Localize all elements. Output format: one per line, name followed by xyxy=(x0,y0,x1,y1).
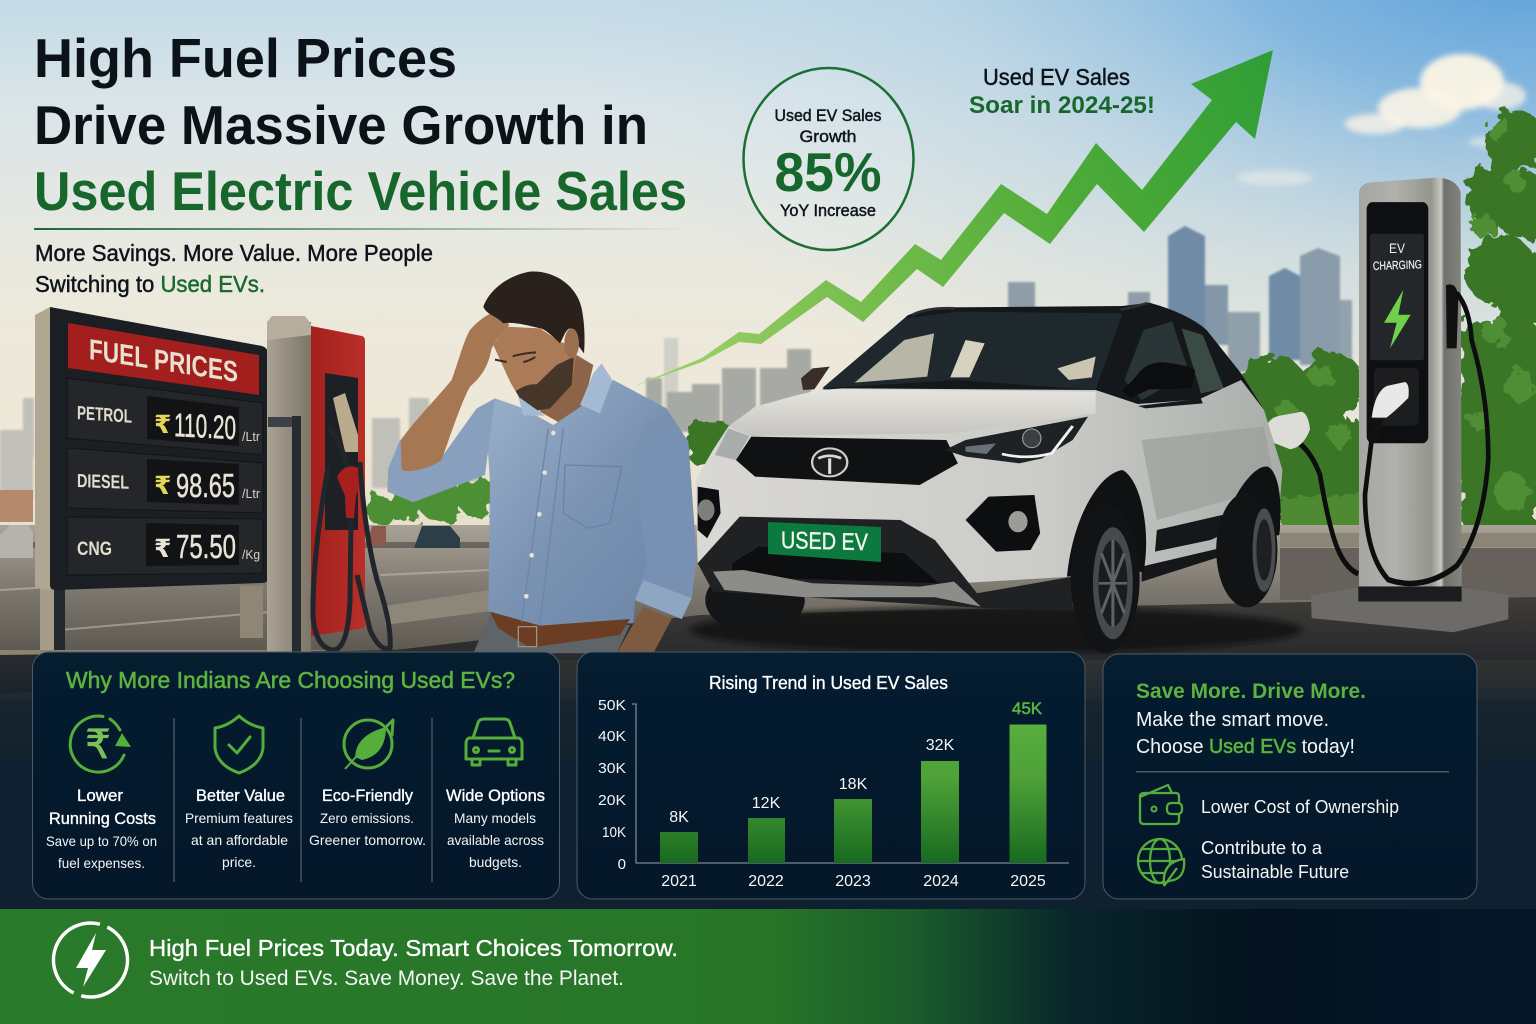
y axis labels: 0 xyxy=(618,856,626,873)
subtitle xyxy=(35,240,433,297)
price row: cng: CNG xyxy=(77,539,112,560)
shirt torso xyxy=(485,380,697,627)
bar value labels xyxy=(669,699,1043,826)
bars xyxy=(660,724,1046,863)
sign banner xyxy=(68,323,259,395)
subtitle: Switching to Used EVs. xyxy=(35,271,265,297)
main title xyxy=(34,27,687,222)
icon: car xyxy=(466,719,522,765)
right headlight xyxy=(944,417,1088,463)
benefit: cost of ownership: Lower Cost of Ownership xyxy=(1201,796,1399,817)
icon: leaf xyxy=(344,720,393,769)
x axis years: 2021 xyxy=(661,873,697,890)
fuel pump xyxy=(267,316,390,652)
skid plate xyxy=(713,570,981,607)
item: better value: price. xyxy=(222,854,256,870)
charger tower xyxy=(1359,178,1462,590)
item: better value: Premium features xyxy=(185,810,293,826)
ear xyxy=(564,328,579,358)
price row: petrol: 110.20 xyxy=(174,406,236,446)
price row: petrol xyxy=(67,378,263,455)
growth badge: Used EV Sales xyxy=(774,107,882,125)
bar value labels: 18K xyxy=(839,776,868,793)
charging cables xyxy=(1365,293,1488,583)
ev charging label: EV xyxy=(1389,240,1406,256)
left headlight xyxy=(715,428,749,460)
icon: rupee savings xyxy=(70,716,131,772)
ev charging label xyxy=(1373,240,1422,273)
panel heading: Why More Indians Are Choosing Used EVs? xyxy=(66,667,515,693)
rear wheel arch xyxy=(1216,466,1281,548)
item: lower running costs xyxy=(46,787,157,871)
y axis labels: 10K xyxy=(602,824,626,841)
growth badge: 85% xyxy=(774,141,882,203)
panel: save more xyxy=(1103,654,1477,899)
left front wheel xyxy=(705,567,805,633)
price row: diesel: DIESEL xyxy=(77,471,129,494)
side sill xyxy=(1142,513,1241,582)
price row: diesel: 98.65 xyxy=(176,467,235,504)
distant city skyline xyxy=(0,226,1352,522)
footer text: High Fuel Prices Today. Smart Choices Tomorrow. xyxy=(149,935,678,961)
item: lower running costs: Running Costs xyxy=(49,810,156,828)
price row: petrol: ₹ xyxy=(154,411,171,439)
background sky xyxy=(0,0,1536,560)
used ev number plate: USED EV xyxy=(781,527,868,556)
left fog lamp xyxy=(698,487,721,538)
arrow caption: Used EV Sales xyxy=(983,64,1130,90)
front wheel arch xyxy=(1067,470,1146,577)
growth badge: YoY Increase xyxy=(780,202,876,220)
y axis labels xyxy=(598,697,626,873)
panel: rising trend bar chart xyxy=(577,652,1085,899)
item: wide options: Wide Options xyxy=(446,787,545,805)
icon: globe with leaf xyxy=(1138,839,1184,886)
item: lower running costs: Save up to 70% on xyxy=(46,833,157,849)
item: lower running costs: fuel expenses. xyxy=(58,855,145,871)
road and pavement xyxy=(0,525,1536,700)
x axis years: 2023 xyxy=(835,873,871,890)
panel: why choosing used evs xyxy=(32,652,560,899)
price row: petrol: PETROL xyxy=(77,403,132,428)
used ev number plate xyxy=(768,522,881,562)
sign banner: FUEL PRICES xyxy=(89,334,238,389)
item: wide options: available across xyxy=(447,832,544,848)
price row: cng: 75.50 xyxy=(176,528,236,565)
price row: cng: /Kg xyxy=(242,547,260,562)
growth badge: Growth xyxy=(800,128,856,146)
hood xyxy=(728,389,1096,436)
icon: lightning circle xyxy=(41,910,140,1010)
tata badge xyxy=(812,448,847,476)
grille xyxy=(736,437,958,485)
price row: cng xyxy=(67,517,263,575)
icon: rupee savings: ₹ xyxy=(85,723,111,767)
x axis years: 2022 xyxy=(748,873,784,890)
subtitle: More Savings. More Value. More People xyxy=(35,240,433,266)
stressed man xyxy=(387,272,697,653)
suv car xyxy=(690,303,1302,653)
icon: wallet xyxy=(1140,785,1182,824)
item: better value: Better Value xyxy=(196,787,285,805)
roof and cabin xyxy=(822,303,1264,410)
wing mirror right xyxy=(1122,362,1195,398)
roadside cars xyxy=(0,525,460,558)
icon: shield xyxy=(215,716,263,773)
side windows xyxy=(1124,322,1189,400)
benefit: sustainable future xyxy=(1201,837,1349,882)
footer text xyxy=(149,935,678,990)
collar xyxy=(580,363,612,413)
price row: diesel: /Ltr xyxy=(242,486,261,501)
item: lower running costs: Lower xyxy=(77,787,124,805)
item: better value xyxy=(185,787,293,870)
eyebrows and eyes xyxy=(495,352,536,362)
y axis labels: 30K xyxy=(598,760,626,777)
neck xyxy=(540,355,593,425)
item: wide options: Many models xyxy=(454,810,536,826)
rear wheel xyxy=(1216,493,1277,607)
main title: Drive Massive Growth in xyxy=(34,94,648,156)
hair xyxy=(483,272,585,353)
charger base xyxy=(1311,588,1508,632)
charger connector xyxy=(1372,382,1409,418)
pocket xyxy=(563,465,622,528)
bar value labels: 12K xyxy=(752,795,781,812)
price row: diesel xyxy=(67,448,263,513)
face xyxy=(493,327,577,412)
chart title: Rising Trend in Used EV Sales xyxy=(709,673,948,693)
main title: High Fuel Prices xyxy=(34,27,457,89)
ev charging label: CHARGING xyxy=(1373,257,1422,273)
beard xyxy=(516,357,574,412)
placket xyxy=(522,428,563,623)
windshield xyxy=(822,312,1122,390)
arrow caption xyxy=(969,64,1155,119)
fuel price sign xyxy=(35,307,268,650)
price row: cng: ₹ xyxy=(154,535,171,563)
call to action text: Make the smart move. xyxy=(1136,709,1329,731)
call to action text: Choose Used EVs today! xyxy=(1136,736,1355,758)
chart axes xyxy=(632,704,1069,863)
bar value labels: 8K xyxy=(669,809,689,826)
roof rails xyxy=(912,303,1147,315)
footer banner xyxy=(0,909,1536,1024)
item: eco-friendly: Eco-Friendly xyxy=(322,787,414,805)
holster xyxy=(1446,284,1458,348)
call to action text xyxy=(1136,679,1366,758)
clouds xyxy=(1237,54,1526,186)
benefit: sustainable future: Sustainable Future xyxy=(1201,861,1349,882)
car charging plug xyxy=(1265,412,1310,449)
item: wide options: budgets. xyxy=(469,854,522,870)
forearm and hand xyxy=(401,311,509,471)
pump nozzle xyxy=(313,393,390,650)
footer text: Switch to Used EVs. Save Money. Save the Planet. xyxy=(149,967,624,990)
raised sleeve xyxy=(387,398,495,502)
x axis years xyxy=(661,873,1046,890)
y axis labels: 20K xyxy=(598,792,626,809)
right fog lamp xyxy=(966,495,1040,552)
call to action text: Save More. Drive More. xyxy=(1136,679,1366,703)
item: eco-friendly xyxy=(309,787,426,848)
x axis years: 2025 xyxy=(1010,873,1046,890)
arrow caption: Soar in 2024-25! xyxy=(969,92,1155,119)
price row: petrol: /Ltr xyxy=(242,429,261,444)
bar value labels: 45K xyxy=(1012,699,1043,718)
price row: diesel: ₹ xyxy=(154,472,171,500)
trousers xyxy=(473,615,630,653)
y axis labels: 40K xyxy=(598,728,626,745)
growth badge xyxy=(744,68,914,250)
car body xyxy=(696,380,1282,583)
right forearm xyxy=(617,607,672,653)
y axis labels: 50K xyxy=(598,697,626,714)
trend arrow xyxy=(632,50,1273,387)
item: eco-friendly: Greener tomorrow. xyxy=(309,832,426,848)
wing mirror left xyxy=(801,367,830,390)
front wheel xyxy=(1071,503,1140,653)
charger screen xyxy=(1367,202,1428,443)
benefit: sustainable future: Contribute to a xyxy=(1201,837,1323,858)
door reflections xyxy=(1142,427,1276,520)
item: eco-friendly: Zero emissions. xyxy=(320,810,414,826)
right sleeve xyxy=(633,412,697,619)
belt xyxy=(490,612,630,648)
lower backdrop strip xyxy=(0,660,1536,910)
lower bumper xyxy=(698,517,1073,608)
item: wide options xyxy=(446,787,545,870)
item: better value: at an affordable xyxy=(191,832,288,848)
ev charger xyxy=(1265,178,1508,632)
trees and hedges xyxy=(366,110,1536,538)
main title: Used Electric Vehicle Sales xyxy=(34,160,687,222)
x axis years: 2024 xyxy=(923,873,959,890)
bar value labels: 32K xyxy=(926,737,955,754)
